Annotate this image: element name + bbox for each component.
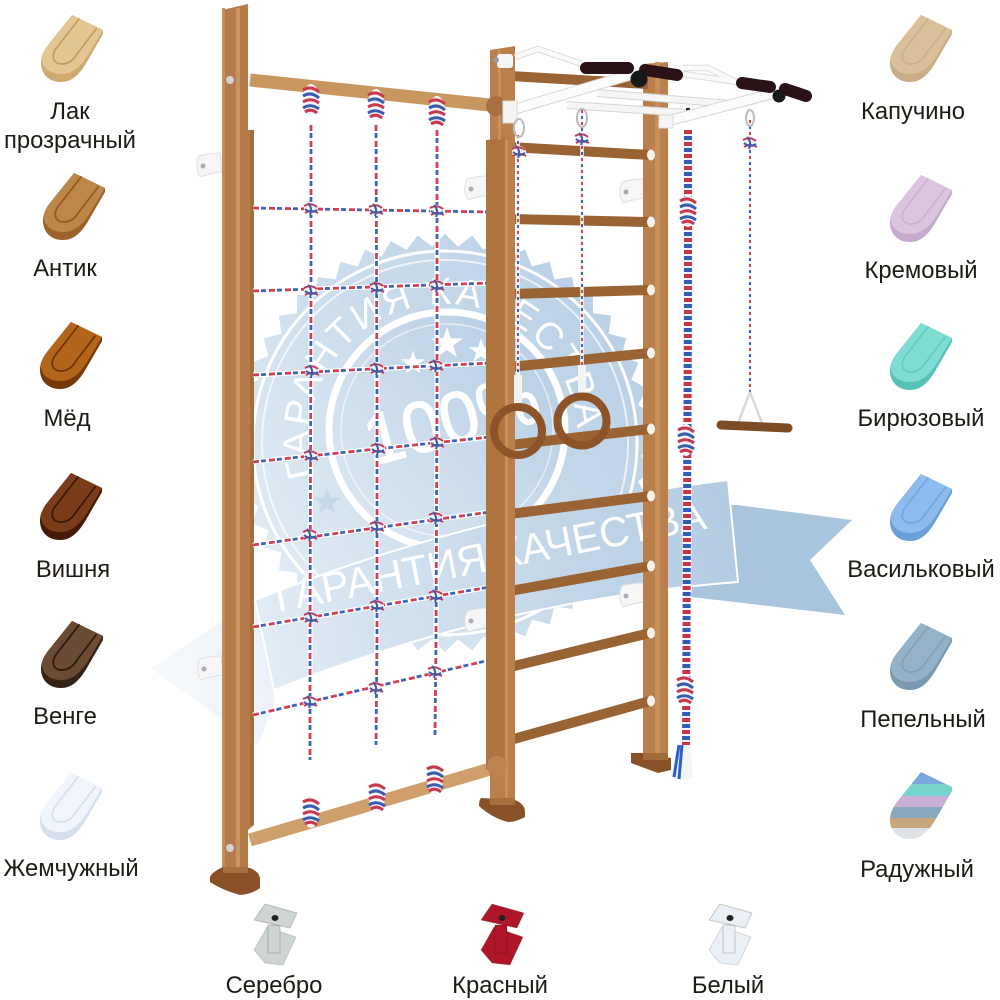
trapeze strands bbox=[738, 392, 762, 423]
arms bbox=[505, 73, 637, 112]
label: Серебро: Серебро bbox=[226, 972, 322, 999]
quality ribbon bbox=[150, 480, 852, 745]
wall brackets bbox=[197, 153, 645, 680]
label: Жемчужный: Жемчужный bbox=[3, 855, 139, 882]
thin ropes bbox=[518, 110, 750, 405]
label: Радужный: Радужный bbox=[860, 856, 974, 883]
rope frayed end bbox=[671, 745, 693, 780]
mount: серебро bbox=[254, 904, 297, 965]
net knots bbox=[303, 203, 444, 708]
ribbon text: ГАРАНТИЯ КАЧЕСТВА bbox=[271, 491, 710, 621]
label: Бирюзовый: Бирюзовый bbox=[858, 405, 984, 432]
quality seal background bbox=[254, 234, 643, 652]
ring strap knots bbox=[514, 375, 522, 405]
label: Мёд: Мёд bbox=[44, 405, 91, 432]
label: Красный: Красный bbox=[452, 972, 548, 999]
climbing net bbox=[253, 84, 490, 828]
rung end caps bbox=[647, 150, 655, 706]
swatch: Венге bbox=[41, 621, 103, 688]
mount: красный bbox=[481, 904, 524, 965]
swatch: Радужный bbox=[890, 772, 952, 839]
label: Антик: Антик bbox=[33, 255, 97, 282]
swatches right column bbox=[890, 15, 952, 839]
cross tubes bbox=[567, 105, 688, 113]
label: Васильковый: Васильковый bbox=[847, 556, 995, 583]
seal stars: ★ bbox=[400, 348, 426, 378]
top knots bbox=[303, 84, 445, 128]
left post base bbox=[210, 867, 260, 895]
ladder rungs bbox=[510, 76, 650, 740]
net rope white core bbox=[253, 125, 490, 760]
label: Пепельный: Пепельный bbox=[860, 706, 986, 733]
mount: белый bbox=[709, 904, 752, 965]
label: Капучино: Капучино bbox=[861, 98, 965, 125]
label: Лак прозрачный: прозрачный bbox=[4, 127, 136, 154]
swatch: Жемчужный bbox=[40, 773, 102, 840]
right ring bbox=[558, 396, 606, 446]
swatch: Капучино bbox=[890, 15, 952, 82]
swatch: Вишня bbox=[40, 473, 102, 540]
bottom knots bbox=[303, 763, 443, 828]
swatch: Антик bbox=[43, 173, 105, 240]
climbing rope bbox=[671, 130, 696, 780]
trapeze bar bbox=[721, 425, 788, 428]
right post base bbox=[631, 753, 671, 773]
label: Вишня: Вишня bbox=[36, 556, 110, 583]
swatch: Лак прозрачный bbox=[41, 15, 103, 82]
seal percent: 100% bbox=[355, 358, 548, 481]
rope knots bbox=[512, 146, 526, 158]
ring hooks bbox=[514, 119, 524, 137]
right labels bbox=[847, 98, 995, 883]
label: Кремовый: Кремовый bbox=[865, 257, 977, 284]
label: Белый: Белый bbox=[692, 972, 764, 999]
rope knots bbox=[680, 195, 696, 227]
label: Венге: Венге bbox=[33, 703, 97, 730]
grips bbox=[586, 68, 806, 96]
swatch: Мёд bbox=[40, 322, 102, 389]
label: Лак прозрачный: Лак bbox=[50, 98, 90, 125]
net rungs bbox=[250, 80, 497, 840]
grip balls bbox=[630, 70, 648, 88]
right ladder post bbox=[631, 62, 671, 773]
swatch: Кремовый bbox=[890, 175, 952, 242]
net rope red twist bbox=[253, 125, 490, 760]
net rope blue twist bbox=[253, 125, 490, 760]
seal stars: ★ bbox=[312, 486, 342, 519]
left post bbox=[210, 4, 260, 895]
seal ring text: ГАРАНТИЯ КАЧЕСТВА bbox=[283, 278, 602, 479]
ribbon left tail bbox=[150, 600, 275, 745]
ribbon right tail bbox=[691, 505, 852, 615]
swatch: Пепельный bbox=[890, 623, 952, 690]
swatch: Васильковый bbox=[890, 474, 952, 541]
seal stars: ★ bbox=[468, 336, 494, 366]
left ring bbox=[494, 407, 542, 455]
ribbon band bbox=[255, 480, 738, 690]
post plates bbox=[486, 96, 506, 116]
middle post bbox=[479, 46, 525, 822]
left post bolts bbox=[226, 76, 234, 84]
bottom labels bbox=[226, 972, 764, 999]
swatches left column bbox=[40, 15, 105, 840]
seal stars: ★ bbox=[430, 325, 464, 363]
upper frame bbox=[515, 49, 582, 64]
gymnastic rings and swing ropes bbox=[494, 109, 788, 455]
pull-up bar bbox=[493, 49, 806, 128]
left labels bbox=[3, 98, 139, 882]
swatch: Бирюзовый bbox=[890, 323, 952, 390]
seal stars bbox=[312, 325, 494, 519]
middle post base bbox=[479, 798, 525, 822]
